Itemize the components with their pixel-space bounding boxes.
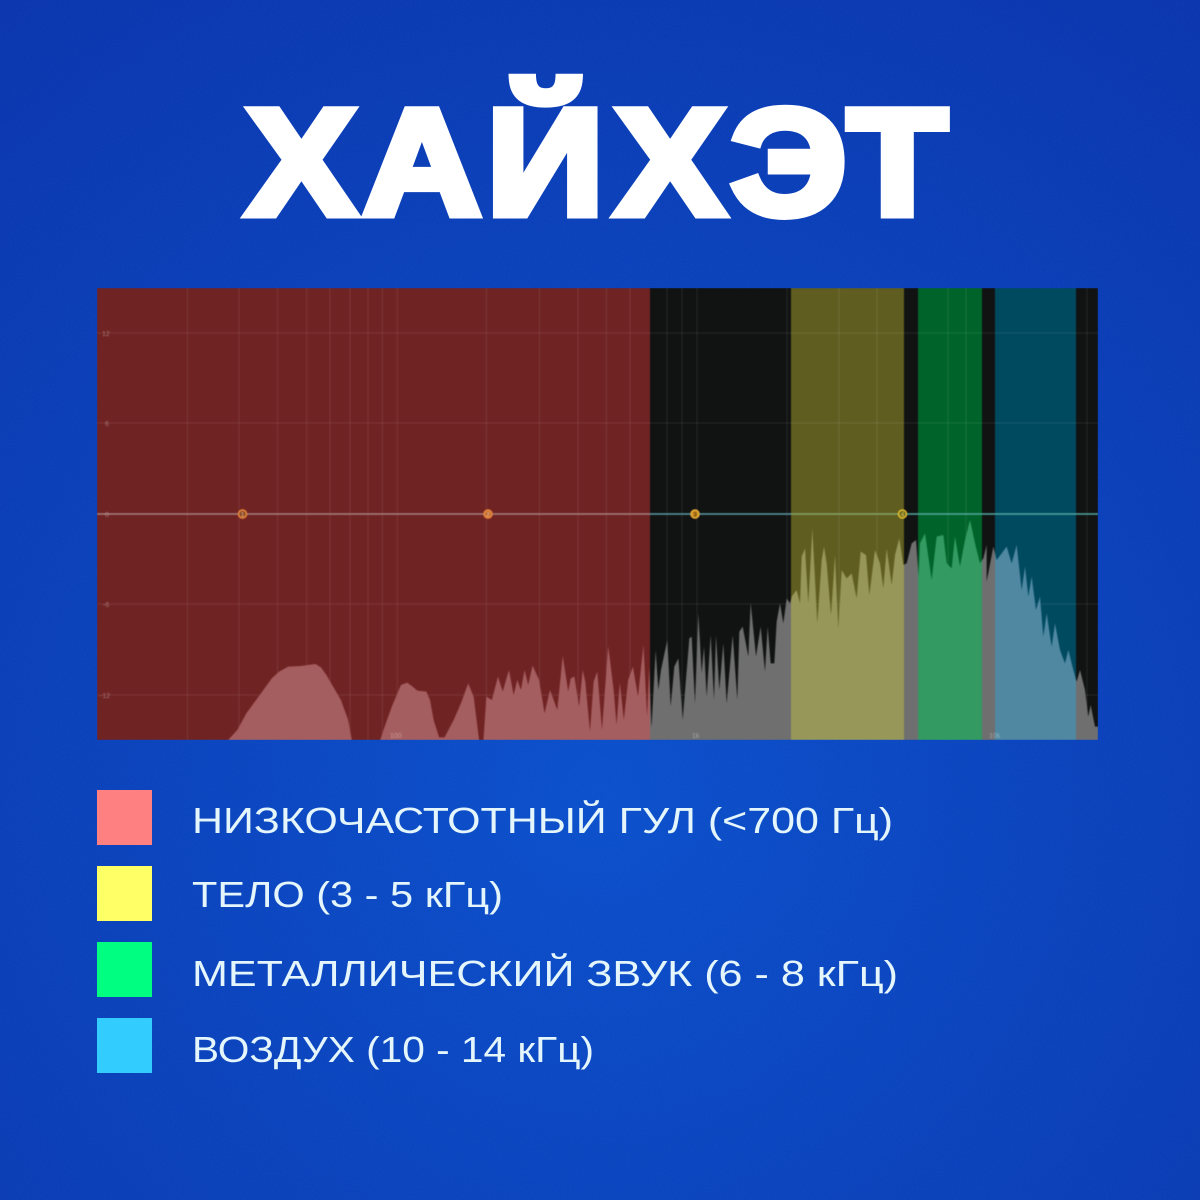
axis labels: 6 <box>105 421 109 428</box>
spectrum: metallic segment <box>918 520 982 740</box>
EQ node 4 <box>898 510 906 518</box>
EQ node 2: 2 <box>486 512 490 518</box>
EQ node 1 <box>238 510 246 518</box>
legend swatch: metallic sound <box>97 942 152 997</box>
EQ node 4: 4 <box>901 512 905 518</box>
spectrum: low rumble segment <box>228 646 650 740</box>
legend swatch: body <box>97 866 152 921</box>
EQ node 3 <box>691 510 699 518</box>
EQ node 1: 1 <box>241 512 245 518</box>
axis labels: -6 <box>103 602 109 609</box>
legend label: air: ВОЗДУХ (10 - 14 кГц) <box>192 1029 594 1070</box>
axis labels: 10k <box>989 733 1001 740</box>
title: ХАЙХЭТ <box>247 78 947 247</box>
spectrum: air segment <box>994 546 1076 740</box>
band: low rumble <box>97 288 650 740</box>
legend label: metallic sound: МЕТАЛЛИЧЕСКИЙ ЗВУК (6 - 8 кГц) <box>192 952 898 994</box>
legend swatch: air <box>97 1018 152 1073</box>
axis labels: 12 <box>102 331 110 338</box>
axis labels: 100 <box>390 733 402 740</box>
spectrum: body segment <box>790 530 904 740</box>
zero line <box>97 513 1098 515</box>
axis labels: -12 <box>100 693 110 700</box>
band: body <box>791 288 904 740</box>
legend <box>97 790 898 1073</box>
axis labels <box>100 331 1001 740</box>
legend swatch: low rumble <box>97 790 152 845</box>
band: air <box>995 288 1076 740</box>
legend label: low rumble: НИЗКОЧАСТОТНЫЙ ГУЛ (<700 Гц) <box>192 799 893 841</box>
axis labels: 0 <box>105 512 109 519</box>
chart: frequency spectrum with highlighted bands <box>97 288 1098 740</box>
legend label: body: ТЕЛО (3 - 5 кГц) <box>192 874 503 915</box>
spectrum: neutral segments <box>650 540 1098 740</box>
axis labels: 1k <box>692 733 700 740</box>
EQ node 2 <box>484 510 492 518</box>
EQ node 3: 3 <box>693 512 697 518</box>
band: metallic sound <box>918 288 982 740</box>
